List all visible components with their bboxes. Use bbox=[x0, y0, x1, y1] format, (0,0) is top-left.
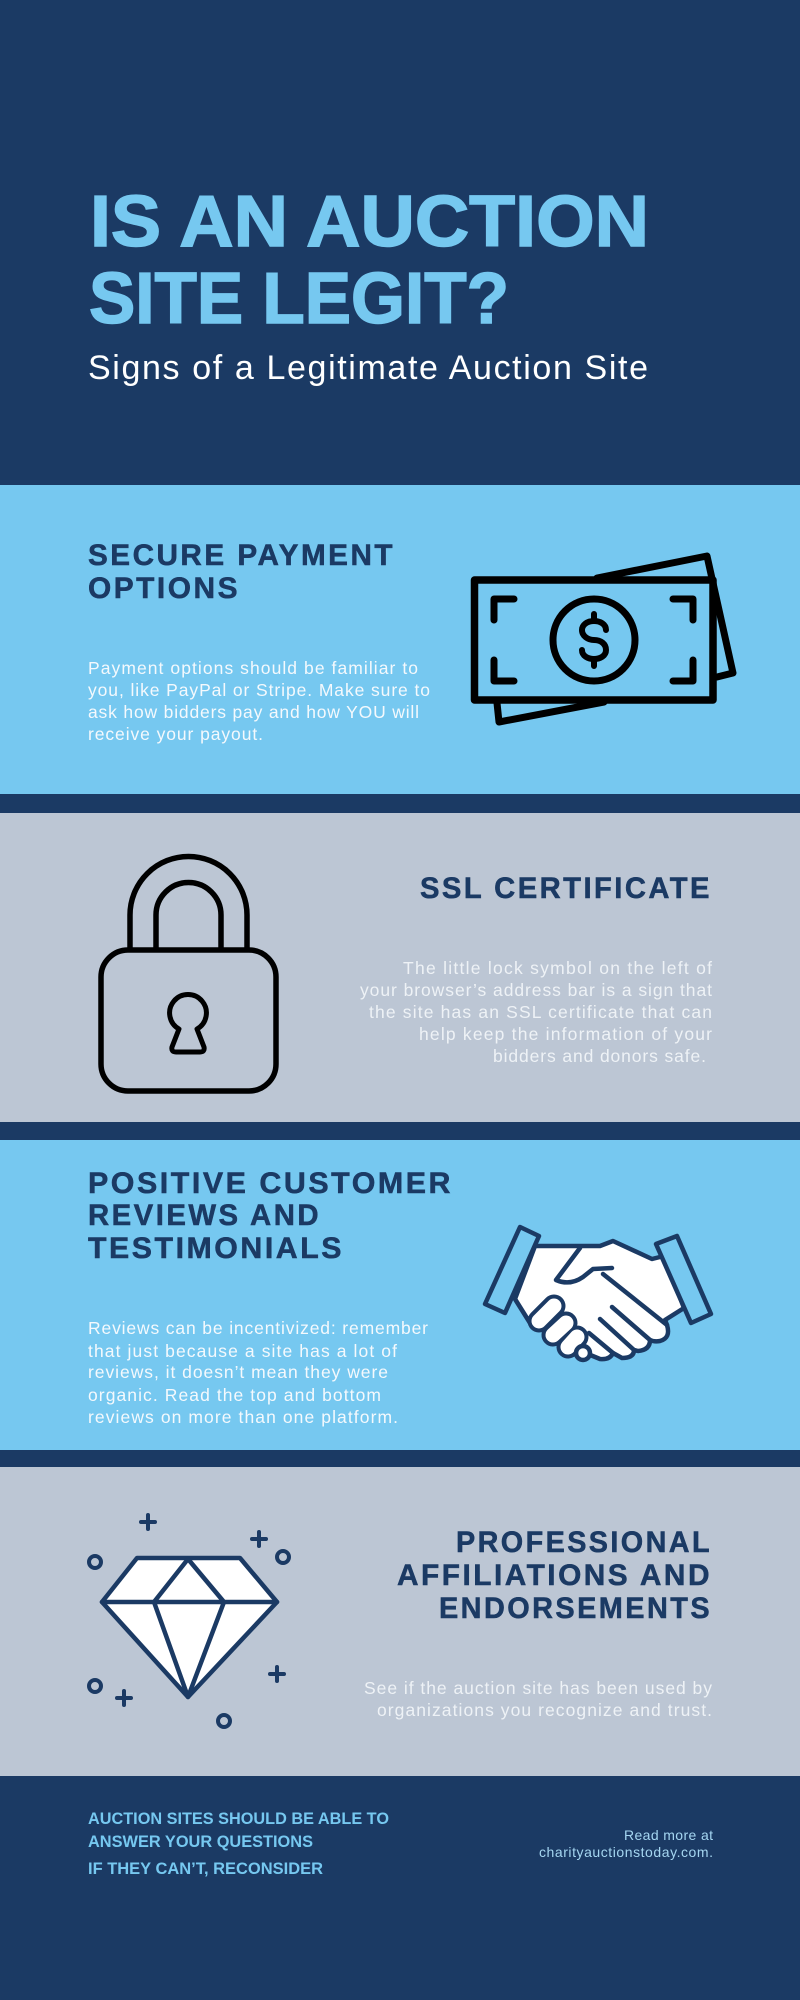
heading: professional affiliations and endorsements: AFFILIATIONS AND bbox=[397, 1559, 712, 1592]
text: affiliations body: See if the auction site has been used by bbox=[364, 1678, 712, 1698]
text: payment options body: ask how bidders pay and how YOU will bbox=[88, 702, 419, 722]
text: reviews body: organic. Read the top and bottom bbox=[88, 1385, 381, 1405]
text: payment options body: you, like PayPal or Stripe. Make sure to bbox=[88, 680, 430, 700]
text: ssl body: your browser’s address bar is a sign that bbox=[360, 980, 712, 1000]
source credit: Read more at bbox=[624, 1827, 713, 1843]
text: payment options body: receive your payout. bbox=[88, 724, 263, 744]
panel: professional affiliations bbox=[0, 1467, 800, 1776]
heading: secure payment options: OPTIONS bbox=[88, 572, 240, 605]
footer callout: AUCTION SITES SHOULD BE ABLE TO bbox=[88, 1810, 389, 1828]
source credit bbox=[539, 1827, 713, 1860]
heading: ssl certificate: SSL CERTIFICATE bbox=[420, 872, 712, 905]
text: affiliations body bbox=[364, 1678, 712, 1720]
text: payment options body bbox=[88, 658, 430, 744]
heading: professional affiliations and endorsements bbox=[397, 1526, 712, 1625]
text: ssl body: help keep the information of your bbox=[419, 1024, 712, 1044]
footer callout: ANSWER YOUR QUESTIONS bbox=[88, 1833, 313, 1851]
icon: handshake bbox=[485, 1227, 711, 1360]
heading: positive customer reviews and testimonials bbox=[88, 1167, 453, 1265]
title: IS AN AUCTION bbox=[90, 182, 649, 262]
icon: diamond with sparkles bbox=[89, 1515, 289, 1727]
heading: positive customer reviews and testimonials: REVIEWS AND bbox=[88, 1199, 321, 1232]
footer callout: IF THEY CAN’T, RECONSIDER bbox=[88, 1860, 323, 1878]
heading: positive customer reviews and testimonials: TESTIMONIALS bbox=[88, 1232, 344, 1265]
text: reviews body: that just because a site has a lot of bbox=[88, 1341, 397, 1361]
text: affiliations body: organizations you recognize and trust. bbox=[377, 1700, 712, 1720]
title: SITE LEGIT? bbox=[89, 259, 509, 339]
panel: ssl certificate bbox=[0, 813, 800, 1122]
footer bbox=[88, 1810, 713, 1878]
title bbox=[89, 182, 649, 339]
heading: secure payment options: SECURE PAYMENT bbox=[88, 539, 395, 572]
footer callout bbox=[88, 1810, 389, 1878]
source credit: charityauctionstoday.com. bbox=[539, 1844, 713, 1860]
text: reviews body: reviews on more than one platform. bbox=[88, 1407, 398, 1427]
heading: professional affiliations and endorsements: PROFESSIONAL bbox=[456, 1526, 712, 1559]
heading: professional affiliations and endorsements: ENDORSEMENTS bbox=[439, 1592, 712, 1625]
panel: positive customer reviews bbox=[0, 1140, 800, 1450]
text: reviews body: Reviews can be incentivized: remember bbox=[88, 1318, 428, 1338]
text: ssl body bbox=[360, 958, 712, 1066]
header panel bbox=[88, 182, 649, 387]
heading: positive customer reviews and testimonials: POSITIVE CUSTOMER bbox=[88, 1167, 453, 1200]
icon: money bills bbox=[474, 556, 733, 722]
panel: secure payment options bbox=[0, 485, 800, 794]
text: ssl body: bidders and donors safe. bbox=[493, 1046, 706, 1066]
text: ssl body: the site has an SSL certificate that can bbox=[369, 1002, 712, 1022]
text: reviews body bbox=[88, 1318, 428, 1427]
icon: padlock bbox=[101, 857, 276, 1091]
text: reviews body: reviews, it doesn’t mean they were bbox=[88, 1362, 388, 1382]
text: payment options body: Payment options should be familiar to bbox=[88, 658, 418, 678]
subtitle: Signs of a Legitimate Auction Site bbox=[88, 349, 648, 387]
text: ssl body: The little lock symbol on the left of bbox=[403, 958, 712, 978]
heading: secure payment options bbox=[88, 539, 395, 605]
